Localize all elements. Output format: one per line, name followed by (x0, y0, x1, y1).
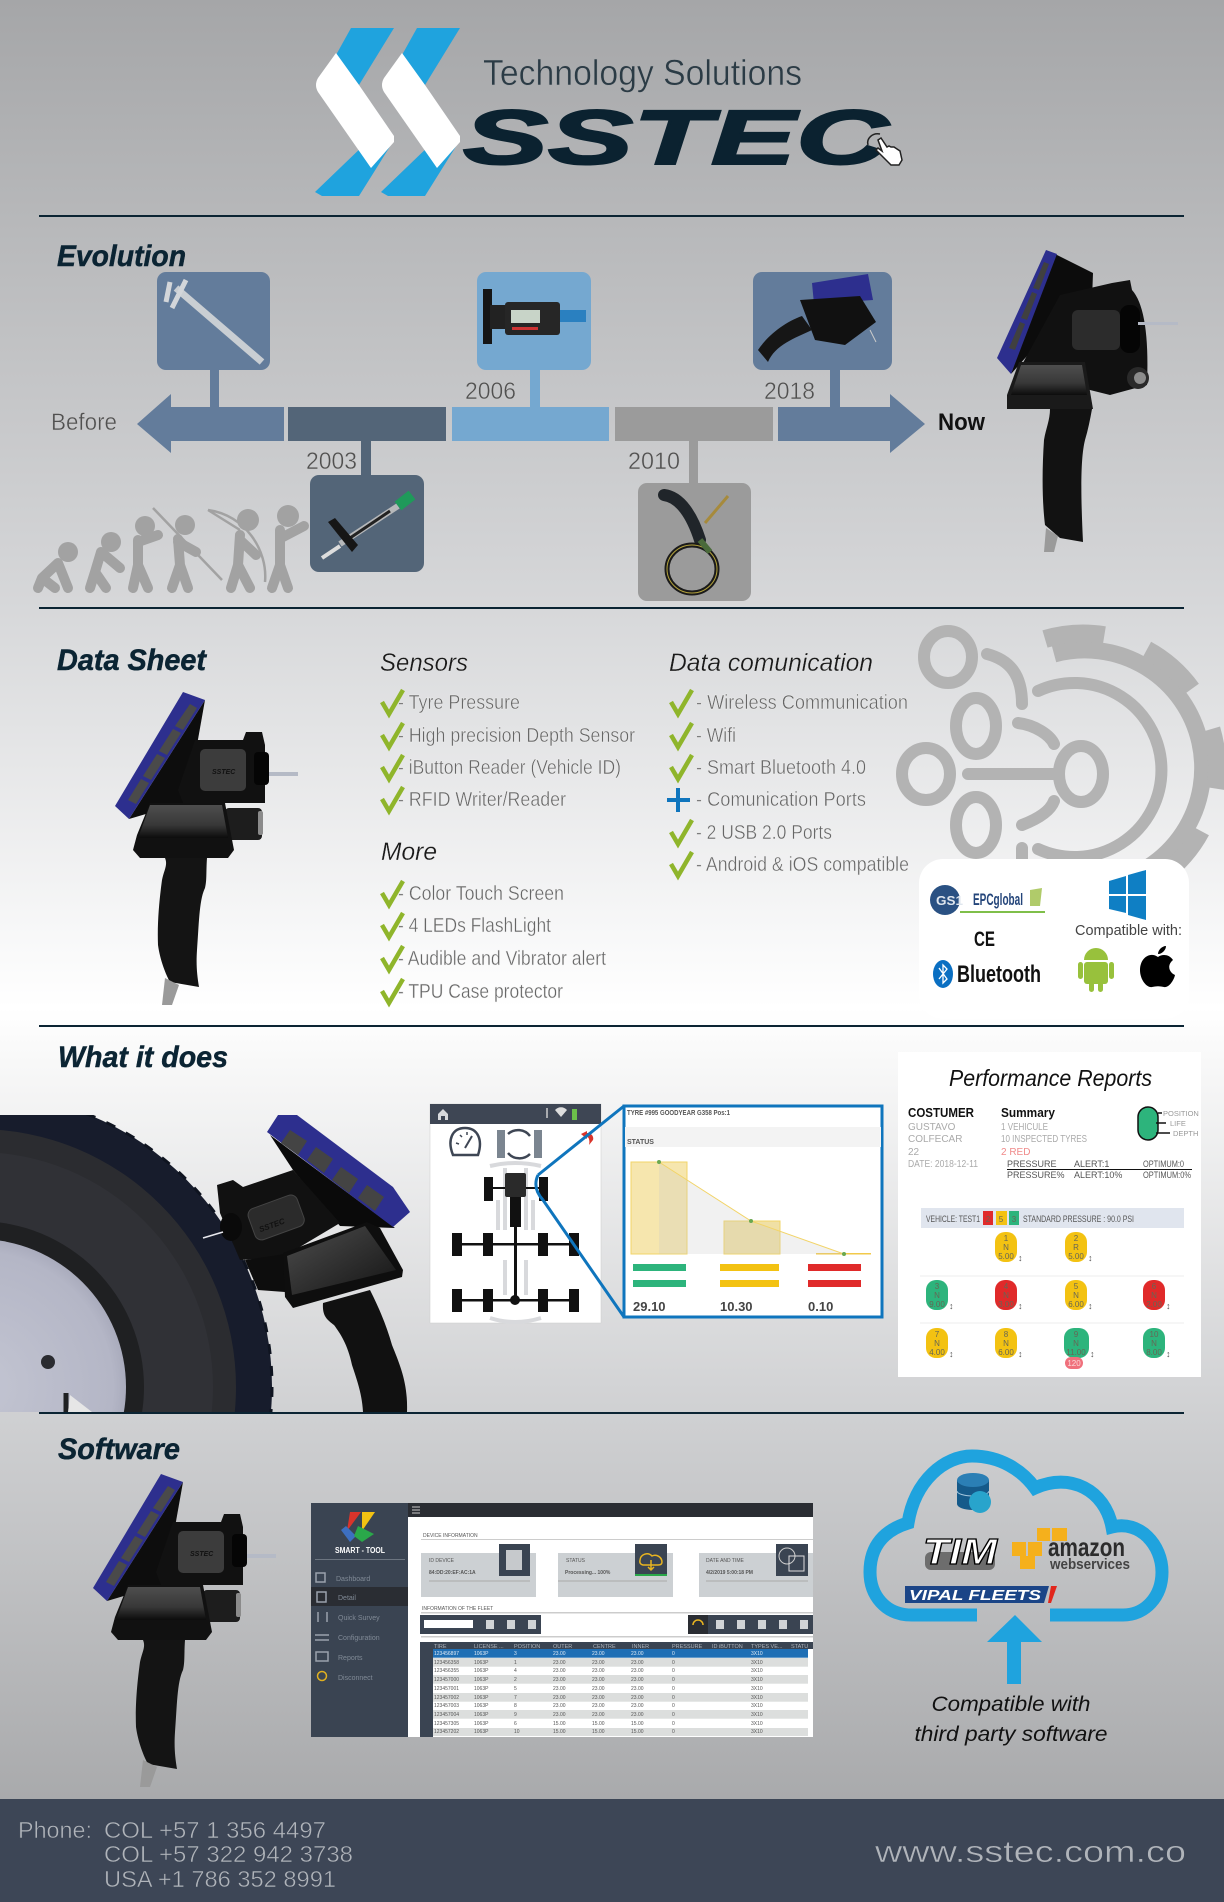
tyre pills: ↕ (1090, 1349, 1094, 1359)
customer block (908, 1106, 978, 1170)
tyre pills: 7 (935, 1330, 940, 1339)
tyre pills: ↕ (1088, 1253, 1092, 1263)
fleet table: 3X10 (751, 1651, 763, 1657)
device information: STATUS (566, 1558, 586, 1564)
customer block: COSTUMER (908, 1106, 974, 1120)
icon: SSTEC chevrons (315, 28, 460, 196)
tyre pills: 1 (1004, 1234, 1009, 1243)
panel: data sheet (57, 631, 1217, 1019)
logo: Amazon Web Services: amazon (1048, 1532, 1125, 1562)
tyre pills: 5.00 (1068, 1252, 1084, 1261)
fleet table: 123457001 (434, 1686, 459, 1692)
panel: performance reports (898, 1052, 1201, 1377)
tyre pills: 8.00 (1146, 1348, 1162, 1357)
heading: Performance Reports (949, 1065, 1152, 1091)
fleet table: 23.00 (553, 1686, 566, 1692)
wordmark: SSTEC (463, 95, 890, 181)
tyre pills: ↕ (949, 1349, 954, 1359)
summary block: OPTIMUM:0 (1143, 1159, 1184, 1169)
caption (914, 1692, 1108, 1746)
fleet table: TYPES VE... (751, 1644, 783, 1650)
list: more (381, 838, 606, 1003)
device image: SSTEC (212, 769, 236, 776)
list: data comunication: Data comunication (669, 649, 873, 677)
logo: Bluetooth: Bluetooth (957, 961, 1041, 988)
fleet toolbar (420, 1606, 813, 1638)
list: data comunication: - Comunication Ports (696, 789, 866, 811)
tyre pills: N (1003, 1291, 1009, 1300)
divider (39, 215, 1184, 217)
tyre pills: N (1073, 1339, 1079, 1348)
list: data comunication: - Wireless Communication (696, 692, 908, 714)
heading: Evolution: Evolution (57, 240, 186, 273)
fleet table: 1063P (474, 1668, 489, 1674)
fleet table: 3X10 (751, 1668, 763, 1674)
icon: home (438, 1109, 448, 1120)
fleet table: 23.00 (553, 1651, 566, 1657)
icon: hand cursor (868, 134, 902, 165)
fleet table: 23.00 (631, 1651, 644, 1657)
status bars (633, 1264, 861, 1287)
fleet table: 0 (672, 1668, 675, 1674)
icon: database globe (957, 1473, 991, 1513)
values: 10.30 (720, 1299, 753, 1314)
tyre legend: DEPTH (1173, 1129, 1198, 1138)
customer block: 22 (908, 1147, 920, 1158)
panel: what it does (0, 1041, 1201, 1681)
fleet table: 0 (672, 1651, 675, 1657)
tagline: Technology Solutions (483, 52, 802, 93)
fleet table: 23.00 (553, 1660, 566, 1666)
summary block: ALERT:1 (1074, 1159, 1109, 1169)
panel: software (58, 1433, 1162, 1787)
device image (115, 692, 298, 1005)
phone numbers (18, 1817, 353, 1892)
device on tyre (203, 1115, 410, 1412)
fleet table: 0 (672, 1660, 675, 1666)
fleet table: PRESSURE (672, 1644, 703, 1650)
icon: tyre rotation (497, 1130, 542, 1158)
fleet table: 6 (514, 1721, 517, 1727)
fleet table: 23.00 (592, 1703, 605, 1709)
fleet toolbar: INFORMATION OF THE FLEET (422, 1606, 493, 1612)
fleet table: 3X10 (751, 1695, 763, 1701)
logo: GS1 EPCglobal: EPCglobal (973, 890, 1023, 909)
logo: TIM: TIM (923, 1531, 998, 1572)
fleet table: 23.00 (553, 1677, 566, 1683)
heading: What it does: What it does (58, 1041, 228, 1074)
fleet table: 23.00 (592, 1660, 605, 1666)
label: Now: Now (938, 409, 985, 436)
tyre pills: 8 (1004, 1330, 1009, 1339)
logo: Amazon Web Services (1012, 1528, 1130, 1573)
list: sensors: Sensors (380, 649, 468, 677)
fleet table: 123457002 (434, 1695, 459, 1701)
tyre legend: POSITION (1163, 1109, 1199, 1118)
fleet table: LICENSE ... (474, 1644, 504, 1650)
fleet table: 8 (514, 1703, 517, 1709)
icons: status (547, 1107, 577, 1120)
fleet table: 23.00 (592, 1668, 605, 1674)
phone screenshot: tyre map (430, 1104, 601, 1323)
fleet table: 0 (672, 1721, 675, 1727)
tyre pills: N (1003, 1339, 1009, 1348)
label: compatible with: Compatible with: (1075, 923, 1182, 939)
fleet table: 15.00 (553, 1721, 566, 1727)
summary block: PRESSURE (1007, 1159, 1057, 1169)
logo header (315, 28, 902, 196)
fleet table: 3X10 (751, 1712, 763, 1718)
fleet table: 1 (514, 1660, 517, 1666)
tyre pills (920, 1232, 1184, 1369)
fleet table: STATU (791, 1644, 808, 1650)
axles and tyres (452, 1173, 579, 1312)
logo: Vipal Fleets: VIPAL FLEETS (909, 1587, 1041, 1604)
label: 2018: 2018 (764, 378, 815, 405)
icon: Android (1078, 948, 1114, 992)
label: 2003: 2003 (306, 448, 357, 475)
milestone: before, caliper (157, 272, 270, 408)
milestone: 2018, handheld (753, 272, 892, 408)
summary block: OPTIMUM:0% (1143, 1170, 1191, 1180)
fleet table: 3X10 (751, 1729, 763, 1735)
tyre legend: LIFE (1170, 1119, 1186, 1128)
tyre pills: 4 (1004, 1282, 1009, 1291)
list: data comunication: - Wifi (696, 725, 736, 747)
vehicle band: 3 (1012, 1215, 1017, 1224)
device information: DATE AND TIME (706, 1558, 745, 1564)
phone numbers: COL +57 322 942 3738 (104, 1841, 353, 1867)
tyre pills: 2 (1074, 1234, 1079, 1243)
tyre pills: 6 (1152, 1282, 1157, 1291)
website: www.sstec.com.co (874, 1834, 1186, 1869)
vehicle band: 5 (999, 1215, 1004, 1224)
device image (93, 1474, 276, 1787)
fleet table: 10 (514, 1729, 520, 1735)
fleet table: 23.00 (553, 1695, 566, 1701)
list: data comunication: - Smart Bluetooth 4.0 (696, 757, 866, 779)
fleet table: 23.00 (592, 1677, 605, 1683)
milestone: 2010, inflator hose (628, 441, 751, 601)
fleet table: 1063P (474, 1651, 489, 1657)
fleet table: 15.00 (592, 1729, 605, 1735)
fleet table: 0 (672, 1703, 675, 1709)
fleet table: OUTER (553, 1644, 572, 1650)
fleet table: 3X10 (751, 1721, 763, 1727)
logo: CE: CE (974, 928, 995, 951)
list: sensors: - Tyre Pressure (398, 692, 520, 714)
fleet table: ID iBUTTON (712, 1644, 743, 1650)
fleet table: 3X10 (751, 1686, 763, 1692)
tyre legend (1138, 1107, 1199, 1140)
fleet table: 23.00 (553, 1712, 566, 1718)
fleet table: 23.00 (592, 1651, 605, 1657)
fleet table: 3X10 (751, 1660, 763, 1666)
tyre pills: ↕ (1166, 1301, 1170, 1311)
fleet table: 23.00 (631, 1712, 644, 1718)
fleet table: 1063P (474, 1729, 489, 1735)
tyre pills: 6.00 (998, 1348, 1014, 1357)
fleet table: TIRE (434, 1644, 447, 1650)
divider (39, 1025, 1184, 1027)
sidebar: Detail (338, 1595, 356, 1602)
sidebar: Configuration (338, 1635, 380, 1642)
summary block (1001, 1106, 1192, 1180)
title: TYRE #995 GOODYEAR G358 Pos:1 (627, 1108, 730, 1117)
fleet table: 23.00 (631, 1660, 644, 1666)
list: more: More (381, 838, 437, 866)
logo: Vipal Fleets (905, 1586, 1057, 1604)
list: data comunication (667, 649, 909, 876)
fleet table: 1063P (474, 1677, 489, 1683)
fleet table: 3X10 (751, 1703, 763, 1709)
fleet table: 123457202 (434, 1729, 459, 1735)
fleet table: 0 (672, 1712, 675, 1718)
tyre pills: 10 (1150, 1330, 1159, 1339)
divider (39, 607, 1184, 609)
sidebar: Reports (338, 1655, 363, 1662)
arrow: up into cloud (987, 1615, 1042, 1684)
fleet table: 0 (672, 1686, 675, 1692)
tyre pills: 9.00 (929, 1300, 945, 1309)
values (633, 1299, 833, 1314)
divider (39, 1412, 1184, 1414)
customer block: GUSTAVO (908, 1122, 956, 1133)
tyre pills: 5 (1074, 1282, 1079, 1291)
fleet table: CENTRE (593, 1644, 616, 1650)
summary block: 10 INSPECTED TYRES (1001, 1134, 1087, 1145)
tyre pills: N (934, 1339, 940, 1348)
fleet table: 123457305 (434, 1721, 459, 1727)
software screenshot (311, 1503, 813, 1737)
caption: Compatible with (932, 1692, 1090, 1716)
list: more: - Color Touch Screen (398, 883, 564, 905)
label: 2010: 2010 (628, 448, 680, 475)
footer (0, 1799, 1224, 1902)
tyre pills: 5.00 (998, 1252, 1014, 1261)
vehicle chassis (490, 1163, 541, 1322)
tyre pills: 2.00 (1146, 1300, 1162, 1309)
list: data comunication: - Android & iOS compatible (696, 854, 909, 876)
sidebar: Dashboard (336, 1576, 370, 1583)
summary block: 2 RED (1001, 1147, 1030, 1158)
icon: Apple (1140, 946, 1175, 987)
tyre pills: N (1151, 1339, 1157, 1348)
list: data comunication: - 2 USB 2.0 Ports (696, 822, 832, 844)
customer block: COLFECAR (908, 1134, 962, 1145)
phone numbers: USA +1 786 352 8991 (104, 1866, 336, 1892)
logo: Bluetooth (933, 960, 1041, 988)
summary block: PRESSURE% (1007, 1170, 1065, 1180)
fleet table: 15.00 (592, 1721, 605, 1727)
list: sensors: - High precision Depth Sensor (398, 725, 635, 747)
tyre pills: ↕ (1088, 1301, 1092, 1311)
phone numbers: COL +57 1 356 4497 (104, 1817, 326, 1843)
tyre pills: 4.00 (929, 1348, 945, 1357)
device on tyre: SSTEC (258, 1217, 286, 1234)
tyre pills: 3 (935, 1282, 940, 1291)
heading: Data Sheet: Data Sheet (57, 644, 208, 677)
tyre pills: N (1003, 1243, 1009, 1252)
values: 0.10 (808, 1299, 833, 1314)
icon: red back arrow (581, 1131, 593, 1145)
list: sensors (380, 649, 635, 811)
chart (631, 1160, 871, 1256)
icon: gear and circuit (902, 631, 1217, 896)
sidebar: SMART - TOOL (335, 1546, 385, 1555)
summary block: Summary (1001, 1106, 1055, 1120)
phone numbers: Phone: (18, 1817, 92, 1843)
fleet table: 7 (514, 1695, 517, 1701)
vehicle band (921, 1208, 1184, 1228)
fleet table: 123457004 (434, 1712, 459, 1718)
list: more: - TPU Case protector (398, 981, 563, 1003)
device image: SSTEC (190, 1551, 214, 1558)
label: 2006: 2006 (465, 378, 516, 405)
tyre pills: 3.00 (998, 1300, 1014, 1309)
tyre pills: ↕ (1018, 1349, 1022, 1359)
vehicle band: STANDARD PRESSURE : 90.0 PSI (1023, 1214, 1134, 1225)
fleet table: 23.00 (631, 1668, 644, 1674)
fleet table: 1063P (474, 1712, 489, 1718)
fleet table: 2 (514, 1677, 517, 1683)
fleet table (420, 1642, 813, 1737)
panel: evolution (38, 240, 1178, 601)
fleet table: 0 (672, 1695, 675, 1701)
caption: third party software (914, 1722, 1108, 1746)
status band (625, 1127, 881, 1147)
logo: GS1 EPCglobal (930, 885, 1045, 915)
fleet table: 23.00 (631, 1703, 644, 1709)
summary block: ALERT:10% (1074, 1170, 1122, 1180)
tyre pills: 6.00 (1068, 1300, 1084, 1309)
fleet table: 23.00 (553, 1703, 566, 1709)
list: more: - 4 LEDs FlashLight (398, 915, 551, 937)
logo: GS1 EPCglobal: GS1 (936, 893, 963, 908)
fleet table: 4 (514, 1668, 517, 1674)
fleet table: 123457003 (434, 1703, 459, 1709)
fleet table: 123456358 (434, 1660, 459, 1666)
tyre pills: 11.00 (1066, 1348, 1086, 1357)
fleet table: 1063P (474, 1695, 489, 1701)
fleet table: 123456355 (434, 1668, 459, 1674)
fleet table: 15.00 (553, 1729, 566, 1735)
fleet table: 1063P (474, 1721, 489, 1727)
fleet table: 3 (514, 1651, 517, 1657)
fleet table: 15.00 (631, 1721, 644, 1727)
callout: tyre status (536, 1106, 882, 1317)
logo: Amazon Web Services: webservices (1049, 1556, 1130, 1573)
vehicle band: VEHICLE: TEST1 (926, 1214, 980, 1225)
tyre pills: N (1151, 1291, 1157, 1300)
tyre pills: N (1073, 1291, 1079, 1300)
fleet table: 1063P (474, 1660, 489, 1666)
tyre pills: ↕ (949, 1301, 954, 1311)
device information: DEVICE INFORMATION (423, 1533, 478, 1539)
values: 29.10 (633, 1299, 666, 1314)
device information: ID DEVICE (429, 1558, 455, 1564)
fleet table: 23.00 (631, 1677, 644, 1683)
milestone: 2006, digital gauge (465, 272, 591, 408)
summary block: 1 VEHICULE (1001, 1122, 1048, 1133)
device information: 84:DD:20:EF:AC:1A (429, 1570, 476, 1576)
fleet table: 23.00 (592, 1712, 605, 1718)
icon: gauge (450, 1128, 480, 1155)
list: sensors: - iButton Reader (Vehicle ID) (398, 757, 621, 779)
device information: Processing... 100% (565, 1570, 611, 1576)
illustration: tyre (0, 1115, 274, 1412)
tyre pills: N (934, 1291, 940, 1300)
tyre pills: ↕ (1018, 1253, 1022, 1263)
fleet table: 9 (514, 1712, 517, 1718)
sidebar: Disconnect (338, 1675, 373, 1682)
tyre pills: ↕ (1018, 1301, 1022, 1311)
illustration: human evolution silhouettes (38, 505, 304, 588)
fleet table: 1063P (474, 1686, 489, 1692)
callout: tyre status: STATUS (627, 1139, 654, 1146)
fleet table: 123457000 (434, 1677, 459, 1683)
tyre pills: 120 (1067, 1359, 1081, 1368)
timeline arrow (137, 394, 925, 453)
fleet table: 23.00 (631, 1695, 644, 1701)
cloud: third party compatibility (870, 1456, 1162, 1746)
icon: Windows (1109, 870, 1146, 920)
list: more: - Audible and Vibrator alert (398, 948, 606, 970)
fleet table: 23.00 (592, 1695, 605, 1701)
list: sensors: - RFID Writer/Reader (398, 789, 566, 811)
device information (421, 1533, 813, 1597)
fleet table: 1063P (474, 1703, 489, 1709)
heading: Software: Software (58, 1433, 180, 1466)
cloud outline (870, 1456, 1162, 1615)
fleet table: 23.00 (631, 1686, 644, 1692)
customer block: DATE: 2018-12-11 (908, 1159, 978, 1170)
milestone: 2003, tread gauge (306, 441, 424, 572)
fleet table: 23.00 (592, 1686, 605, 1692)
fleet table: 0 (672, 1729, 675, 1735)
panel: standards and compatibility (919, 859, 1189, 1019)
fleet table: 5 (514, 1686, 517, 1692)
label: Before: Before (51, 409, 117, 436)
tyre pills: 9 (1074, 1330, 1079, 1339)
fleet table: 123456897 (434, 1651, 459, 1657)
sidebar: Quick Survey (338, 1615, 380, 1622)
fleet table: INNER (632, 1644, 649, 1650)
fleet table: 3X10 (751, 1677, 763, 1683)
hero device (997, 250, 1178, 552)
tyre pills: R (1073, 1243, 1079, 1252)
device information: 4/2/2019 5:00:18 PM (706, 1570, 753, 1576)
vehicle band: 2 (986, 1215, 991, 1224)
fleet table: POSITION (514, 1644, 540, 1650)
fleet table: 23.00 (553, 1668, 566, 1674)
sidebar (311, 1503, 408, 1737)
tyre pills: ↕ (1166, 1349, 1170, 1359)
fleet table: 0 (672, 1677, 675, 1683)
fleet table: 15.00 (631, 1729, 644, 1735)
